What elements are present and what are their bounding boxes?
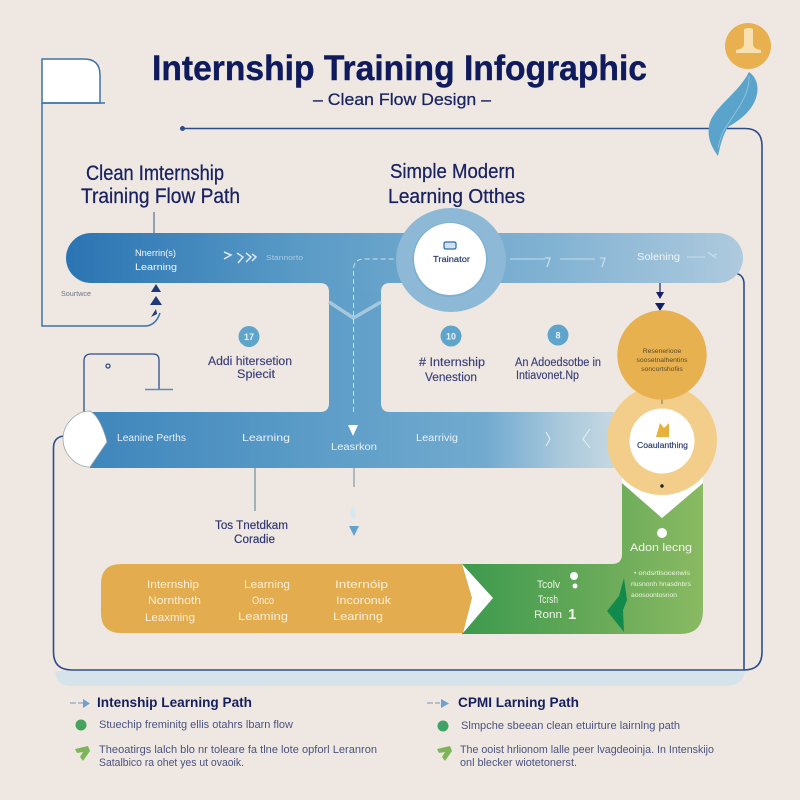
legend: internship learning path: Theoatirgs lalch blo nr toleare fa tlne lote opforl Leranron: [99, 744, 377, 756]
text block: venestion: [419, 357, 485, 384]
top bar labels: Nnerrin(s): [135, 248, 176, 259]
number badge 2: [440, 326, 462, 346]
number badge 3: 8: [555, 330, 561, 340]
orange steps bar: Internship: [147, 579, 199, 591]
heading: flow path: Clean Imternship: [86, 162, 224, 185]
green flow panel: Adon lecng: [630, 542, 692, 554]
green flow panel: [462, 470, 703, 634]
green flow panel: • ondsrtlsocenwis: [634, 570, 691, 577]
node: orange upper circle: soosetnalhentins: [636, 357, 688, 364]
connector lines below bar: [255, 468, 359, 536]
orange steps bar: Nornthoth: [148, 595, 201, 607]
down arrows: [655, 283, 665, 311]
node: orange upper circle: [617, 310, 707, 400]
stem chevron: [329, 302, 381, 318]
orange steps bar: Leaxming: [145, 612, 195, 624]
right bar labels: [510, 252, 717, 267]
lower bar labels: [117, 429, 590, 453]
number badge 1: 17: [244, 332, 254, 342]
lower bar labels: Leanine Perths: [117, 432, 186, 444]
text block: adoedsotbe: Intiavonet.Np: [516, 370, 579, 382]
lower bar labels: Learrivig: [416, 432, 458, 444]
text block: spiecit: Addi hitersetion: [208, 356, 292, 368]
legend: cpmi learning path: [427, 695, 714, 769]
green flow panel: 1: [568, 606, 576, 623]
lower bar labels: Leasrkon: [331, 441, 377, 453]
icon: leaf: [709, 72, 758, 156]
legend: cpmi learning path: CPMI Larning Path: [458, 695, 579, 710]
legend: cpmi learning path: The ooist hrlionom lalle peer lvagdeoinja. In Intenskijo: [460, 744, 714, 756]
node: orange upper circle: Reseneriooe: [643, 348, 681, 355]
node: orange lower circle: Coaulanthing: [637, 440, 688, 450]
orange steps bar: Incoronuk: [336, 595, 392, 607]
node: orange lower circle: [607, 385, 717, 495]
node: orange upper circle: soncortshofiis: [641, 366, 683, 373]
green flow panel: aoosoontosnon: [631, 592, 677, 599]
number badge 1: [238, 326, 260, 347]
orange steps bar: Internóip: [335, 579, 388, 591]
text block: spiecit: Spiecit: [237, 369, 276, 381]
arrow: white chevron: [462, 564, 493, 633]
orange steps bar: Learinng: [333, 611, 383, 623]
node: trainer circle: [396, 208, 506, 312]
title: Internship Training Infographic: [152, 49, 647, 88]
text block: venestion: Venestion: [425, 372, 477, 384]
icon: medal: [725, 23, 771, 69]
legend: internship learning path: Stuechip freminitg ellis otahrs lbarn flow: [99, 719, 293, 731]
text block: adoedsotbe: [515, 357, 601, 382]
outer frame line: [54, 126, 762, 670]
legend: cpmi learning path: onl blecker wiotetonerst.: [460, 757, 577, 769]
green flow panel: rlusnonh hnasdnbrs: [631, 581, 692, 588]
text block: adoedsotbe: An Adoedsotbe in: [515, 357, 601, 369]
subtitle: – Clean Flow Design –: [313, 90, 492, 109]
top bar labels: Stannorto: [266, 253, 303, 262]
text block: coradie: [215, 520, 288, 546]
heading: flow path: [81, 162, 240, 208]
heading: flow path: Training Flow Path: [81, 185, 240, 208]
orange steps bar: Leaming: [238, 611, 288, 623]
node: trainer circle: Trainator: [433, 255, 470, 264]
legend: internship learning path: [70, 695, 377, 769]
text block: coradie: Tos Tnetdkam: [215, 520, 288, 532]
dashed flow line: [348, 259, 400, 436]
text block: venestion: # Internship: [419, 357, 485, 369]
heading: learning: Simple Modern: [390, 161, 515, 183]
legend: cpmi learning path: Slmpche sbeean clean etuirture lairnlng path: [461, 720, 680, 732]
right bar labels: Solening: [637, 252, 680, 263]
top blue bar: [66, 233, 743, 292]
heading: learning: Learning Otthes: [388, 186, 525, 208]
top-left bracket tab: [42, 59, 160, 326]
lower bar labels: Learning: [242, 432, 290, 444]
orange steps bar: [101, 564, 472, 633]
up arrows: [150, 284, 162, 317]
green flow panel: Tcrsh: [538, 594, 558, 606]
bottom shadow band: [55, 671, 745, 686]
top bar labels: [135, 248, 303, 273]
monitor outline icon: [84, 354, 173, 412]
green flow panel: Ronn: [534, 609, 562, 621]
lower blue bar with stem: [90, 275, 640, 468]
orange steps bar: Onco: [252, 595, 274, 607]
heading: learning: [388, 161, 525, 208]
legend: internship learning path: Intenship Learning Path: [97, 695, 252, 710]
left white node: [63, 411, 107, 467]
top bar labels: Learning: [135, 262, 177, 273]
number badge 3: [548, 324, 568, 346]
side label: Sourtwce: [61, 289, 91, 298]
text block: spiecit: [208, 356, 292, 381]
number badge 2: 10: [446, 332, 456, 342]
orange steps bar: Learning: [244, 579, 290, 591]
green flow panel: Tcolv: [537, 579, 560, 591]
legend: internship learning path: Satalbico ra ohet yes ut ovaoik.: [99, 757, 244, 769]
connector line: [153, 212, 155, 233]
text block: coradie: Coradie: [234, 534, 275, 546]
